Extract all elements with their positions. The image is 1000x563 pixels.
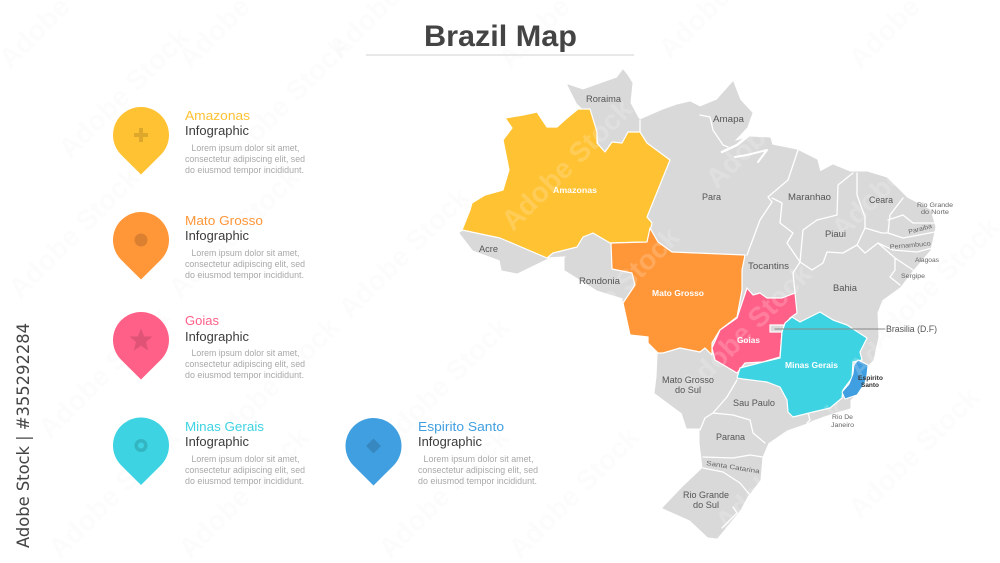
legend: Amazonas: do eiusmod tempor incididunt. bbox=[185, 165, 304, 176]
region: Amazonas bbox=[462, 109, 670, 258]
map labels: Tocantins bbox=[748, 261, 790, 271]
watermark over map: Adobe Stock bbox=[842, 241, 986, 384]
legend: Goias: consectetur adipiscing elit, sed bbox=[185, 359, 305, 370]
map labels: Pernambuco bbox=[890, 240, 931, 251]
pin icon: Minas Gerais ring bbox=[113, 418, 169, 485]
map shapes bbox=[460, 70, 935, 538]
map labels: Rio De bbox=[832, 414, 853, 421]
legend: Espirito Santo: Infographic bbox=[418, 435, 482, 449]
watermark background: Adobe Stock bbox=[2, 161, 146, 304]
watermark background: Adobe Stock bbox=[42, 421, 186, 563]
map labels: Amapa bbox=[713, 114, 744, 124]
legend: Amazonas bbox=[113, 107, 305, 176]
legend: Mato Grosso: Lorem ipsum dolor sit amet, bbox=[192, 248, 300, 259]
map labels: Piaui bbox=[825, 229, 846, 239]
map labels: Rio Grande bbox=[917, 202, 953, 209]
pin icon: Espirito Santo diamond bbox=[346, 418, 402, 486]
legend: Amazonas: Infographic bbox=[185, 124, 249, 138]
map labels bbox=[479, 94, 953, 510]
watermark over map: Adobe Stock bbox=[699, 51, 843, 194]
map labels: Parana bbox=[716, 432, 745, 442]
legend: Goias bbox=[113, 312, 305, 381]
legend: Minas Gerais: Lorem ipsum dolor sit amet, bbox=[192, 454, 300, 465]
watermark background: Adobe Stock bbox=[172, 421, 316, 563]
watermark background: Adobe Stock bbox=[332, 181, 476, 324]
map labels: Minas Gerais bbox=[785, 360, 838, 370]
legend: Espirito Santo: Espirito Santo bbox=[418, 419, 504, 434]
map of Brazil bbox=[460, 51, 986, 538]
gray base map silhouette bbox=[460, 70, 935, 538]
legend: Espirito Santo: Lorem ipsum dolor sit amet, bbox=[424, 454, 534, 465]
legend: Goias: Infographic bbox=[185, 330, 249, 344]
legend: Minas Gerais bbox=[113, 418, 305, 487]
legend: Minas Gerais: Infographic bbox=[185, 435, 249, 449]
watermark background: Adobe Stock bbox=[372, 421, 516, 563]
legend: Amazonas: Lorem ipsum dolor sit amet, bbox=[192, 143, 300, 154]
map labels: do Sul bbox=[693, 500, 719, 510]
region: Espirito Santo bbox=[842, 360, 868, 399]
map labels: Espirito bbox=[858, 375, 883, 382]
legend: Minas Gerais: Minas Gerais bbox=[185, 419, 265, 434]
map labels: Amazonas bbox=[553, 185, 597, 195]
watermark over map: Adobe Stock bbox=[674, 258, 818, 401]
Brasilia pointer line bbox=[775, 328, 885, 330]
region: Mato Grosso bbox=[611, 228, 745, 355]
legend: Espirito Santo: consectetur adipiscing elit, sed bbox=[418, 465, 538, 476]
watermark background: Adobe Stock bbox=[202, 311, 346, 454]
legend: Espirito Santo: do eiusmod tempor incididunt. bbox=[418, 476, 537, 487]
watermark over map bbox=[495, 51, 986, 537]
legend: Mato Grosso: Mato Grosso bbox=[185, 213, 263, 228]
map labels: Maranhao bbox=[788, 192, 831, 202]
region: Minas Gerais bbox=[737, 312, 867, 417]
watermark background: Adobe Stock bbox=[502, 421, 646, 563]
legend: Goias: do eiusmod tempor incididunt. bbox=[185, 370, 304, 381]
stock id text: Adobe Stock | #355292284 bbox=[14, 323, 34, 548]
legend: Goias: Goias bbox=[185, 313, 219, 328]
region: Goias bbox=[712, 288, 797, 373]
map labels: Paraiba bbox=[908, 223, 933, 236]
watermark background: Adobe Stock bbox=[32, 301, 176, 444]
state borders and coastline inlets bbox=[548, 115, 935, 528]
watermark over map: Adobe Stock bbox=[495, 93, 639, 236]
legend: Espirito Santo bbox=[346, 418, 538, 487]
map labels: Bahia bbox=[833, 283, 857, 293]
legend: Minas Gerais: do eiusmod tempor incididunt. bbox=[185, 476, 304, 487]
watermark background: Adobe Stock bbox=[372, 311, 516, 454]
pin icon: Mato Grosso dot bbox=[113, 212, 169, 280]
watermark over map: Adobe Stock bbox=[709, 394, 853, 537]
map labels: Mato Grosso bbox=[662, 375, 714, 385]
pin icon: Goias star bbox=[113, 312, 169, 380]
map labels: Acre bbox=[479, 244, 498, 254]
map labels: Alagoas bbox=[915, 257, 940, 264]
legend: Goias: Lorem ipsum dolor sit amet, bbox=[192, 348, 300, 359]
legend: Mato Grosso: consectetur adipiscing elit, sed bbox=[185, 259, 305, 270]
watermark over map: Adobe Stock bbox=[542, 221, 686, 364]
legend: Amazonas: Amazonas bbox=[185, 108, 251, 123]
map labels: do Norte bbox=[921, 209, 949, 216]
legend: Amazonas: consectetur adipiscing elit, sed bbox=[185, 154, 305, 165]
map labels: Para bbox=[702, 192, 721, 202]
map labels: do Sul bbox=[675, 385, 701, 395]
map labels: Rondonia bbox=[579, 276, 620, 286]
watermark background: Adobe Stock bbox=[212, 31, 356, 174]
map labels: Sau Paulo bbox=[733, 398, 775, 408]
map labels: Sergipe bbox=[901, 273, 925, 280]
map labels: Goias bbox=[737, 335, 760, 345]
map labels: Brasilia (D.F) bbox=[886, 324, 937, 334]
title: Brazil Map bbox=[424, 20, 577, 53]
map labels: Rio Grande bbox=[683, 490, 729, 500]
legend: Mato Grosso: do eiusmod tempor incididunt. bbox=[185, 270, 304, 281]
map labels: Ceara bbox=[869, 195, 893, 205]
watermark background: Adobe Stock bbox=[842, 381, 986, 524]
map labels: Santa Catarina bbox=[706, 460, 761, 475]
map labels: Roraima bbox=[586, 94, 621, 104]
watermark background: Adobe Stock bbox=[162, 161, 306, 304]
map labels: Santo bbox=[861, 382, 879, 389]
watermark background: Adobe Stock bbox=[52, 21, 196, 164]
legend: Minas Gerais: consectetur adipiscing elit, sed bbox=[185, 465, 305, 476]
pin icon: Amazonas plus bbox=[113, 107, 169, 174]
legend: Mato Grosso bbox=[113, 212, 305, 281]
watermark over map: Adobe Stock bbox=[825, 101, 969, 244]
map labels: Janeiro bbox=[831, 422, 854, 429]
map labels: Mato Grosso bbox=[652, 288, 704, 298]
legend: Mato Grosso: Infographic bbox=[185, 229, 249, 243]
